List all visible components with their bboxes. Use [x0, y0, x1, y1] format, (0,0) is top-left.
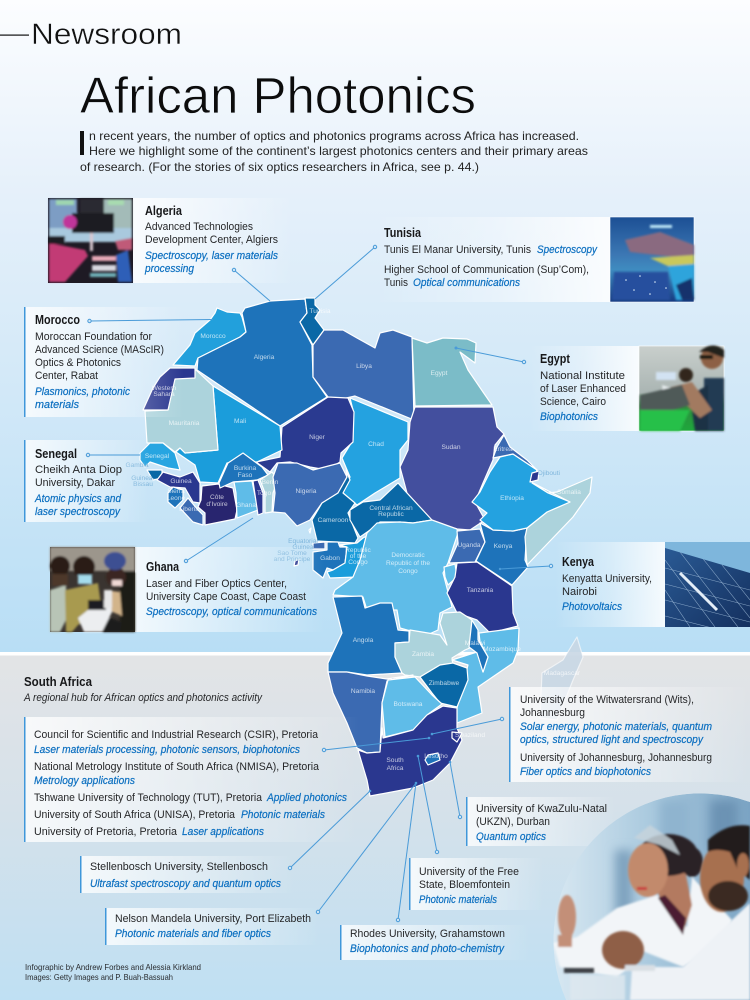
country labels: Chad: [368, 441, 384, 448]
Egypt text: [540, 352, 626, 423]
institutions list: [34, 729, 348, 838]
country labels: Liberia: [179, 506, 199, 513]
intro paragraph: n recent years, the number of optics and photonics programs across Africa has increased.: [89, 129, 579, 143]
Kenya text: Photovoltaics: [562, 601, 623, 613]
Egypt text: of Laser Enhanced: [540, 383, 626, 395]
country labels: Ethiopia: [500, 495, 524, 502]
Algeria text: processing: [144, 263, 194, 275]
panel: Ghana: [50, 547, 325, 632]
Algeria text: Algeria: [145, 204, 183, 218]
country labels: Gambia: [125, 462, 149, 469]
Egypt text: Egypt: [540, 352, 571, 366]
credits: [25, 962, 201, 982]
Nelson Mandela text: Nelson Mandela University, Port Elizabeth: [115, 913, 311, 925]
Egypt text: Biophotonics: [540, 411, 599, 423]
institutions list: Council for Scientific and Industrial Research (CSIR), Pretoria: [34, 729, 318, 741]
Ghana text: Ghana: [146, 560, 180, 574]
country labels: Sierra: [167, 488, 185, 495]
Free State text: [419, 866, 519, 906]
country labels: Niger: [309, 434, 326, 441]
country labels: Nigeria: [296, 488, 317, 495]
Morocco text: [35, 313, 164, 411]
Nelson Mandela text: [115, 913, 311, 940]
intro paragraph: Here we highlight some of the continent’s largest photonics centers and their primary areas: [89, 144, 588, 158]
heading: South Africa: [23, 675, 263, 704]
country labels: of the: [350, 553, 367, 560]
country labels: Swaziland: [455, 732, 485, 739]
connector: Egypt: [454, 346, 526, 364]
Ghana text: [146, 560, 318, 618]
Morocco text: Optics & Photonics: [35, 357, 121, 369]
country labels: Zambia: [412, 651, 434, 658]
Tunisia text: Optical communications: [413, 277, 521, 289]
Free State text: University of the Free: [419, 866, 519, 878]
country labels: Lesotho: [424, 753, 448, 760]
Kenya text: Kenya: [562, 555, 595, 569]
photo: two scientists in a lab: [553, 793, 750, 1000]
heading: South Africa: A regional hub for African optics and photonics activity: [23, 692, 263, 704]
Morocco text: Plasmonics, photonic: [35, 386, 131, 398]
country labels: Angola: [353, 637, 374, 644]
country labels: Tunisia: [309, 308, 331, 315]
country labels: [125, 308, 581, 772]
panel: Tunisia: [375, 217, 694, 302]
country labels: Côte: [210, 494, 224, 501]
institutions list: Applied photonics: [266, 792, 348, 804]
country labels: Mauritania: [169, 420, 200, 427]
country labels: Sahara: [153, 391, 175, 398]
Senegal text: laser spectroscopy: [35, 506, 121, 518]
country labels: Republic of the: [386, 560, 430, 567]
KwaZulu-Natal text: (UKZN), Durban: [476, 816, 550, 828]
panel: South Africa, Pretoria institutions: [24, 717, 359, 842]
Kenya text: Nairobi: [562, 586, 597, 598]
photo: lab with green laser: [639, 345, 724, 431]
country labels: Equatorial: [288, 538, 318, 545]
connector: Tunisia: [315, 245, 377, 299]
Algeria text: [144, 204, 279, 275]
country labels: Congo: [348, 559, 368, 566]
country labels: Madagascar: [544, 670, 581, 677]
woman: [553, 825, 732, 977]
country labels: Uganda: [457, 542, 481, 549]
photo: solar panels: [665, 542, 750, 630]
Nelson Mandela text: Photonic materials and fiber optics: [115, 928, 272, 940]
Morocco text: materials: [35, 399, 80, 411]
Johannesburg text: optics, structured light and spectroscopy: [520, 734, 704, 746]
country labels: Malawi: [465, 640, 486, 647]
country labels: Namibia: [351, 688, 375, 695]
connector: Nelson Mandela: [316, 782, 417, 914]
Ghana text: Spectroscopy, optical communications: [146, 606, 318, 618]
heading: South Africa: South Africa: [24, 675, 93, 689]
connector: Algeria: [232, 268, 270, 301]
country labels: Central African: [369, 505, 413, 512]
Tunisia text: Higher School of Communication (Sup’Com),: [384, 264, 589, 276]
Johannesburg text: Fiber optics and biophotonics: [520, 766, 652, 778]
Johannesburg text: University of the Witwatersrand (Wits),: [520, 694, 694, 706]
Johannesburg text: Solar energy, photonic materials, quantum: [520, 721, 712, 733]
Egypt text: Science, Cairo: [540, 396, 606, 408]
connector: Rhodes: [396, 783, 416, 922]
Morocco text: Advanced Science (MAScIR): [35, 344, 164, 356]
credits: Infographic by Andrew Forbes and Alessia Kirkland: [25, 962, 201, 972]
title: African Photonics: [80, 67, 476, 124]
Ghana text: Laser and Fiber Optics Center,: [146, 578, 287, 590]
panel: Rhodes: [340, 925, 530, 960]
country labels: Western: [152, 385, 177, 392]
connector: Morocco: [88, 319, 213, 323]
country labels: Ghana: [236, 502, 256, 509]
Senegal text: Atomic physics and: [34, 493, 122, 505]
country labels: Republic: [378, 511, 405, 518]
connector: Stellenbosch: [288, 790, 371, 870]
Stellenbosch text: Stellenbosch University, Stellenbosch: [90, 861, 268, 873]
Senegal text: [34, 447, 122, 518]
Algeria text: Spectroscopy, laser materials: [145, 250, 279, 262]
institutions list: Tshwane University of Technology (TUT), Pretoria: [34, 792, 262, 804]
country labels: Eritrea: [493, 446, 513, 453]
glassware: [564, 968, 625, 1000]
country labels: Kenya: [494, 543, 513, 550]
Tunisia text: Spectroscopy: [537, 244, 598, 256]
photo: laser equipment: [48, 198, 133, 283]
country labels: South: [386, 757, 404, 764]
Rhodes text: [350, 928, 505, 955]
Johannesburg text: University of Johannesburg, Johannesburg: [520, 752, 712, 764]
panel: Johannesburg institutions: [509, 687, 750, 782]
Free State text: Photonic materials: [419, 894, 498, 906]
Algeria text: Development Center, Algiers: [145, 234, 278, 246]
institutions list: National Metrology Institute of South Africa (NMISA), Pretoria: [34, 761, 319, 773]
intro paragraph: [80, 129, 588, 174]
Stellenbosch text: Ultrafast spectroscopy and quantum optics: [90, 878, 282, 890]
panel: Egypt: [530, 345, 724, 431]
Morocco text: Moroccan Foundation for: [35, 331, 152, 343]
country shapes: [140, 298, 592, 796]
panel: Free State: [409, 858, 544, 910]
Senegal text: Cheikh Anta Diop: [35, 464, 122, 476]
country labels: Tanzania: [467, 587, 494, 594]
Rhodes text: Biophotonics and photo-chemistry: [350, 943, 505, 955]
connector: Ghana: [184, 518, 253, 563]
institutions list: University of Pretoria, Pretoria: [34, 826, 177, 838]
country labels: Democratic: [391, 552, 425, 559]
panel: KwaZulu-Natal: [466, 797, 616, 846]
country labels: Libya: [356, 363, 372, 370]
panel: Senegal: [24, 440, 149, 522]
country labels: Zimbabwe: [429, 680, 460, 687]
country labels: Sao Tome: [277, 550, 307, 557]
Kenya text: Kenyatta University,: [562, 573, 652, 585]
background: [0, 0, 750, 655]
KwaZulu-Natal text: Quantum optics: [476, 831, 547, 843]
KwaZulu-Natal text: [476, 803, 607, 843]
country labels: Morocco: [200, 333, 226, 340]
Morocco text: Center, Rabat: [35, 370, 98, 382]
intro paragraph: of research. (For the stories of six optics researchers in Africa, see p. 44.): [80, 160, 479, 174]
section label: Newsroom: Newsroom: [31, 18, 182, 51]
country labels: Gabon: [320, 555, 340, 562]
country labels: Guinea: [170, 478, 192, 485]
country labels: Guinea-: [131, 475, 155, 482]
panel: Kenya: [555, 542, 750, 630]
country labels: Congo: [398, 568, 418, 575]
Morocco text: Morocco: [35, 313, 80, 327]
country labels: Leone: [167, 495, 185, 502]
connector: Senegal: [86, 453, 140, 457]
institutions list: Metrology applications: [34, 775, 136, 787]
KwaZulu-Natal text: University of KwaZulu-Natal: [476, 803, 607, 815]
photo: researchers at a microscope: [50, 547, 135, 632]
country labels: Burkina: [234, 465, 257, 472]
Johannesburg text: [520, 694, 712, 778]
institutions list: University of South Africa (UNISA), Pretoria: [34, 809, 235, 821]
Free State text: State, Bloemfontein: [419, 879, 510, 891]
institutions list: Photonic materials: [241, 809, 326, 821]
country labels: Senegal: [145, 453, 170, 460]
Kenya text: [562, 555, 652, 613]
country labels: Algeria: [254, 354, 275, 361]
country labels: Djibouti: [538, 470, 561, 477]
country labels: d’Ivoire: [206, 501, 228, 508]
Algeria text: Advanced Technologies: [145, 221, 253, 233]
country labels: Bissau: [133, 481, 153, 488]
panel: Algeria: [48, 198, 293, 283]
country labels: Sudan: [441, 444, 461, 451]
country labels: Mozambique: [483, 646, 521, 653]
Stellenbosch text: [90, 861, 282, 890]
Senegal text: University, Dakar: [35, 477, 115, 489]
bottom band: South Africa section background: [0, 652, 750, 1000]
country labels: Africa: [387, 765, 404, 772]
panel: Stellenbosch: [80, 856, 295, 893]
country labels: Egypt: [431, 370, 448, 377]
institutions list: Laser applications: [182, 826, 265, 838]
panel: Morocco: [24, 307, 184, 417]
Ghana text: University Cape Coast, Cape Coast: [146, 591, 306, 603]
Tunisia text: [384, 226, 598, 289]
credits: Images: Getty Images and P. Buah-Bassuah: [25, 972, 173, 982]
connector: Pretoria institutions: [322, 737, 430, 752]
country labels: Benin: [262, 479, 279, 486]
Senegal text: Senegal: [35, 447, 77, 461]
Johannesburg text: Johannesburg: [520, 707, 585, 719]
connector: Kenya: [499, 564, 553, 570]
map of Africa: [125, 298, 592, 796]
Tunisia text: Tunis El Manar University, Tunis: [384, 244, 531, 256]
country labels: Botswana: [394, 701, 423, 708]
country labels: Somalia: [557, 489, 581, 496]
country labels: Cameroon: [318, 517, 349, 524]
Tunisia text: Tunisia: [384, 226, 422, 240]
country labels: Guinea: [292, 544, 314, 551]
country labels: Republic: [345, 547, 372, 554]
country labels: and Principe: [274, 556, 311, 563]
connector: Johannesburg: [431, 717, 504, 735]
man: [602, 825, 750, 1000]
Tunisia text: Tunis: [384, 277, 408, 289]
connector: Free State: [417, 755, 439, 854]
Rhodes text: Rhodes University, Grahamstown: [350, 928, 505, 940]
connector: KwaZulu-Natal: [449, 761, 462, 819]
photo: network: [610, 217, 694, 302]
Egypt text: National Institute: [540, 370, 625, 382]
country labels: Mali: [234, 418, 247, 425]
institutions list: Laser materials processing, photonic sensors, biophotonics: [34, 744, 301, 756]
country labels: Faso: [238, 472, 253, 479]
country labels: Togo: [257, 490, 271, 497]
panel: Nelson Mandela: [105, 908, 320, 945]
